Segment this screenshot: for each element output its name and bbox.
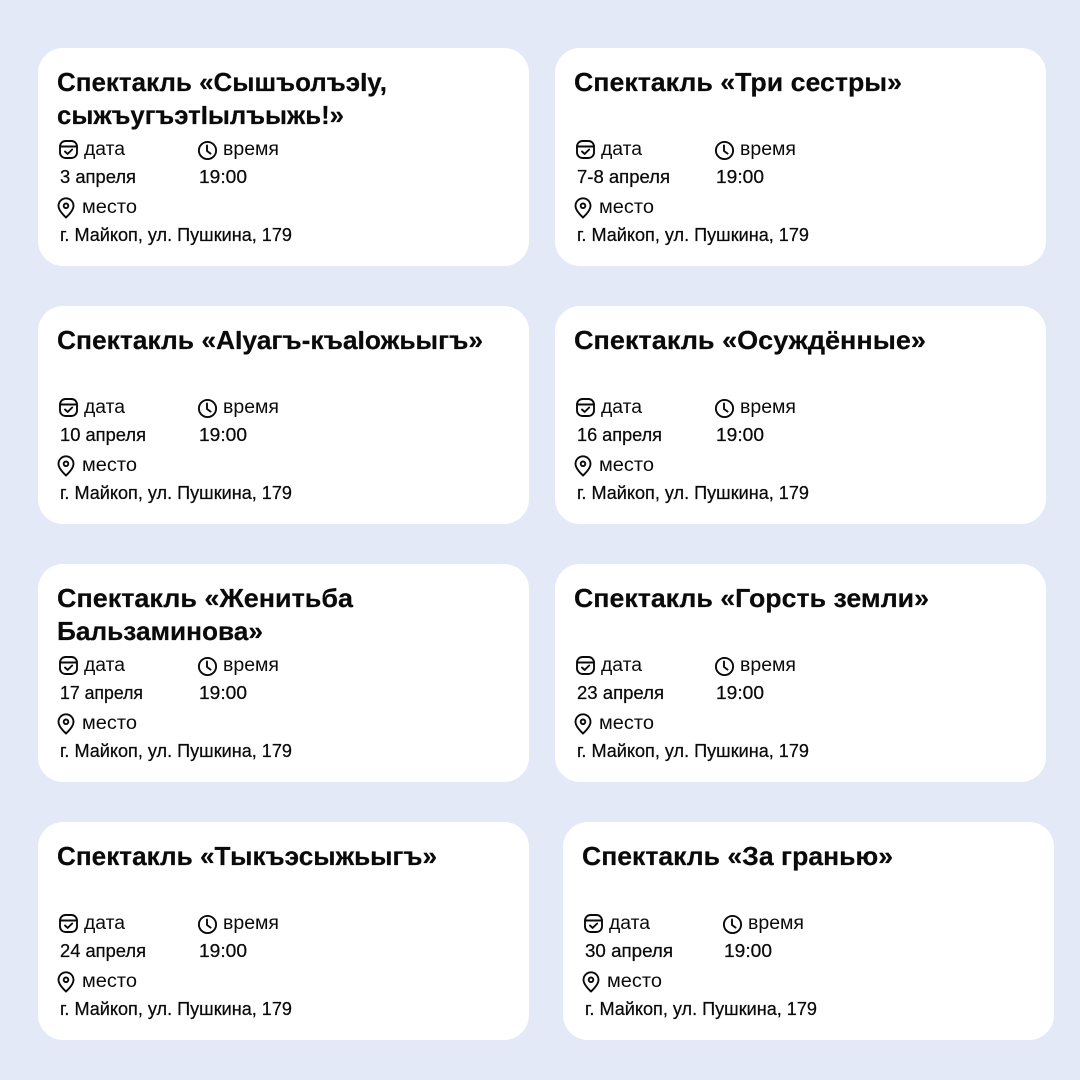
- date value: 16 апреля: [577, 424, 662, 445]
- address: г. Майкоп, ул. Пушкина, 179: [577, 482, 809, 503]
- time value: 19:00: [199, 166, 247, 187]
- icon: calendar: [60, 141, 77, 158]
- icon: calendar: [60, 915, 77, 932]
- place label: место: [82, 713, 137, 734]
- address: г. Майкоп, ул. Пушкина, 179: [585, 998, 817, 1019]
- time label: время: [740, 655, 796, 676]
- icon: calendar: [577, 141, 594, 158]
- place label: место: [82, 197, 137, 218]
- title: Бальзаминова»: [57, 616, 263, 646]
- time value: 19:00: [199, 682, 247, 703]
- address: г. Майкоп, ул. Пушкина, 179: [577, 224, 809, 245]
- icon: location pin: [576, 714, 590, 734]
- place label: место: [607, 971, 662, 992]
- place label: место: [599, 197, 654, 218]
- panel: Женитьба Бальзаминова: [38, 564, 529, 782]
- address: г. Майкоп, ул. Пушкина, 179: [60, 224, 292, 245]
- time value: 19:00: [716, 166, 764, 187]
- date label: дата: [601, 655, 642, 676]
- icon: clock: [716, 400, 733, 417]
- panel: Горсть земли: [555, 564, 1046, 782]
- place label: место: [82, 455, 137, 476]
- title: сыжъугъэтIылъыжь!»: [57, 100, 344, 130]
- time label: время: [740, 139, 796, 160]
- icon: clock: [716, 142, 733, 159]
- address: г. Майкоп, ул. Пушкина, 179: [60, 482, 292, 503]
- icon: clock: [716, 658, 733, 675]
- time value: 19:00: [199, 940, 247, 961]
- title: Спектакль «Три сестры»: [574, 67, 902, 97]
- icon: location pin: [58, 714, 74, 734]
- panel: Сышъолъэ1у: [38, 48, 529, 266]
- icon: calendar: [577, 657, 594, 674]
- date label: дата: [84, 139, 125, 160]
- title: Спектакль «АIуагъ-къаIожьыгъ»: [57, 325, 483, 355]
- icon: calendar: [585, 915, 602, 932]
- title: Спектакль «За гранью»: [582, 841, 893, 871]
- address: г. Майкоп, ул. Пушкина, 179: [60, 740, 292, 761]
- time label: время: [740, 397, 796, 418]
- title: [57, 67, 387, 130]
- date value: 3 апреля: [60, 166, 136, 187]
- panel: Аlуагъ-къаlожьыгъ: [38, 306, 529, 524]
- icon: location pin: [576, 198, 590, 218]
- title: Спектакль «Тыкъэсыжьыгъ»: [57, 841, 437, 871]
- title: Спектакль «СышъолъэIу,: [57, 67, 387, 97]
- icon: clock: [724, 916, 741, 933]
- time value: 19:00: [716, 682, 764, 703]
- title: [57, 583, 354, 646]
- icon: calendar: [60, 399, 77, 416]
- date label: дата: [84, 655, 125, 676]
- title: Спектакль «Горсть земли»: [574, 583, 929, 613]
- date label: дата: [84, 397, 125, 418]
- time label: время: [223, 913, 279, 934]
- icon: clock: [199, 400, 216, 417]
- icon: location pin: [584, 972, 598, 992]
- panel: За гранью: [563, 822, 1054, 1040]
- title: Спектакль «Женитьба: [57, 583, 354, 613]
- date value: 7-8 апреля: [577, 166, 670, 187]
- time label: время: [223, 397, 279, 418]
- date label: дата: [601, 139, 642, 160]
- address: г. Майкоп, ул. Пушкина, 179: [60, 998, 292, 1019]
- address: г. Майкоп, ул. Пушкина, 179: [577, 740, 809, 761]
- icon: location pin: [58, 456, 74, 476]
- time label: время: [223, 139, 279, 160]
- icon: clock: [199, 142, 216, 159]
- date value: 10 апреля: [60, 424, 146, 445]
- icon: location pin: [58, 972, 74, 992]
- place label: место: [599, 455, 654, 476]
- title: Спектакль «Осуждённые»: [574, 325, 926, 355]
- date value: 30 апреля: [585, 940, 673, 961]
- date label: дата: [609, 913, 650, 934]
- panel: Тыкъэсыжьыгъ: [38, 822, 529, 1040]
- time value: 19:00: [199, 424, 247, 445]
- icon: clock: [199, 658, 216, 675]
- date value: 23 апреля: [577, 682, 664, 703]
- place label: место: [599, 713, 654, 734]
- date label: дата: [84, 913, 125, 934]
- date value: 17 апреля: [60, 682, 143, 703]
- icon: location pin: [576, 456, 590, 476]
- time value: 19:00: [716, 424, 764, 445]
- panel: Три сестры: [555, 48, 1046, 266]
- panel: Осуждённые: [555, 306, 1046, 524]
- icon: calendar: [577, 399, 594, 416]
- place label: место: [82, 971, 137, 992]
- date label: дата: [601, 397, 642, 418]
- date value: 24 апреля: [60, 940, 146, 961]
- time label: время: [748, 913, 804, 934]
- icon: clock: [199, 916, 216, 933]
- icon: calendar: [60, 657, 77, 674]
- time value: 19:00: [724, 940, 772, 961]
- icon: location pin: [58, 198, 74, 218]
- time label: время: [223, 655, 279, 676]
